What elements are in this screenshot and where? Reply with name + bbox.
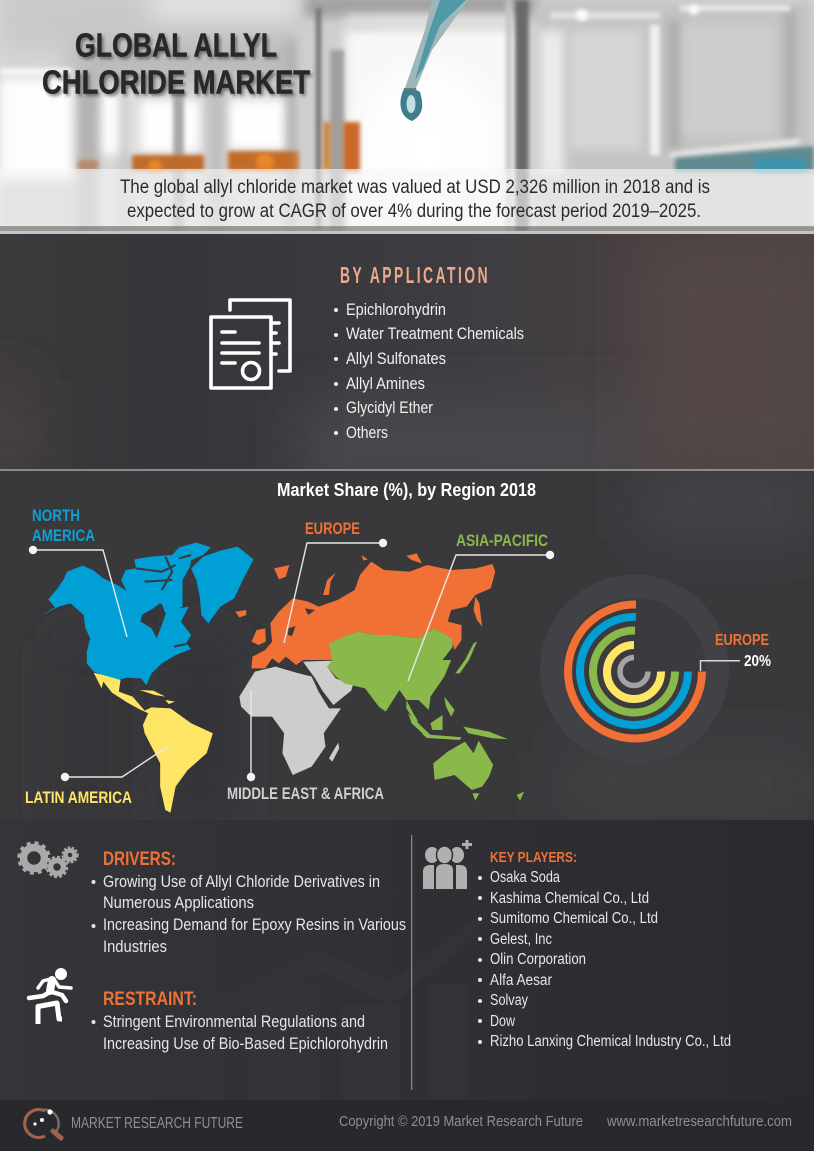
footer brand: MARKET RESEARCH FUTURE bbox=[71, 1115, 243, 1132]
panel: by application bbox=[0, 234, 814, 490]
title: CHLORIDE MARKET bbox=[44, 67, 312, 104]
application list: Epichlorohydrin bbox=[346, 301, 446, 319]
summary text: The global allyl chloride market was valued at USD 2,326 million in 2018 and is bbox=[120, 177, 710, 198]
heading: market share: Market Share (%), by Region 2018 bbox=[277, 479, 536, 500]
panel: footer bbox=[0, 1100, 814, 1151]
title: GLOBAL ALLYL bbox=[75, 28, 277, 64]
drivers list: Growing Use of Allyl Chloride Derivatives in bbox=[103, 873, 380, 891]
icon: documents bbox=[211, 300, 290, 388]
region: latin america bbox=[94, 673, 213, 813]
chart: radial share chart bbox=[540, 574, 771, 764]
world map bbox=[41, 543, 524, 813]
region label: latin america: LATIN AMERICA bbox=[25, 789, 132, 807]
arctic channels bbox=[136, 555, 191, 647]
application list: Allyl Amines bbox=[346, 375, 425, 393]
region label: asia-pacific: ASIA-PACIFIC bbox=[456, 532, 548, 550]
region: europe and russia bbox=[235, 553, 495, 668]
icon: logo magnifier bbox=[25, 1109, 61, 1138]
restraint list bbox=[92, 1013, 388, 1053]
key players list: Alfa Aesar bbox=[490, 972, 552, 989]
drivers list bbox=[92, 873, 406, 956]
icon: pipette with drop bbox=[400, 0, 468, 121]
application list: Allyl Sulfonates bbox=[346, 350, 446, 368]
drivers list: Industries bbox=[103, 938, 167, 956]
europe callout: EUROPE bbox=[715, 632, 769, 649]
region label: north america: AMERICA bbox=[32, 527, 95, 545]
region label: north america: NORTH bbox=[32, 507, 80, 525]
title: GLOBAL ALLYL bbox=[77, 30, 279, 67]
key players list: Olin Corporation bbox=[490, 951, 586, 968]
key players list: Solvay bbox=[490, 992, 528, 1009]
region: asia pacific bbox=[327, 628, 524, 801]
title bbox=[42, 28, 312, 104]
panel: summary band bbox=[0, 169, 814, 234]
icon: hurdle runner bbox=[29, 968, 71, 1024]
restraint list: Increasing Use of Bio-Based Epichlorohydrin bbox=[103, 1035, 388, 1053]
key players list: Dow bbox=[490, 1013, 516, 1030]
region: north america bbox=[41, 543, 253, 685]
application list bbox=[334, 301, 524, 442]
key players list: Osaka Soda bbox=[490, 869, 560, 886]
key players list: Kashima Chemical Co., Ltd bbox=[490, 890, 649, 907]
europe callout: 20% bbox=[744, 653, 771, 670]
summary text bbox=[120, 177, 710, 222]
panel: market share by region bbox=[0, 471, 814, 820]
application list: Others bbox=[346, 424, 388, 442]
region label: europe: EUROPE bbox=[305, 520, 360, 538]
icon: gears bbox=[19, 843, 78, 877]
icon: people with plus bbox=[423, 840, 472, 889]
restraint list: Stringent Environmental Regulations and bbox=[103, 1013, 365, 1031]
region: middle east and africa bbox=[239, 661, 353, 775]
europe callout bbox=[700, 632, 771, 671]
panel: hero photo of laboratory glassware bbox=[0, 0, 814, 250]
heading: by application: BY APPLICATION bbox=[340, 264, 488, 289]
leader lines bbox=[29, 539, 554, 781]
region label: north america bbox=[32, 507, 95, 545]
region label: middle east and africa: MIDDLE EAST & AFRICA bbox=[227, 785, 384, 803]
heading: drivers: DRIVERS: bbox=[103, 849, 176, 870]
footer copyright: Copyright © 2019 Market Research Future bbox=[339, 1113, 583, 1130]
application list: Glycidyl Ether bbox=[346, 399, 433, 417]
application list: Water Treatment Chemicals bbox=[346, 325, 524, 343]
drivers list: Numerous Applications bbox=[103, 894, 254, 912]
summary text: expected to grow at CAGR of over 4% during the forecast period 2019–2025. bbox=[127, 201, 701, 222]
key players list: Sumitomo Chemical Co., Ltd bbox=[490, 910, 658, 927]
panel: drivers, restraint, key players bbox=[0, 820, 814, 1101]
heading: restraint: RESTRAINT: bbox=[103, 989, 197, 1010]
footer website: www.marketresearchfuture.com bbox=[606, 1113, 792, 1130]
key players list bbox=[478, 869, 731, 1050]
heading: key players: KEY PLAYERS: bbox=[490, 849, 577, 866]
title: CHLORIDE MARKET bbox=[42, 64, 310, 102]
key players list: Rizho Lanxing Chemical Industry Co., Ltd bbox=[490, 1033, 731, 1050]
drivers list: Increasing Demand for Epoxy Resins in Various bbox=[103, 916, 406, 934]
key players list: Gelest, Inc bbox=[490, 931, 552, 948]
